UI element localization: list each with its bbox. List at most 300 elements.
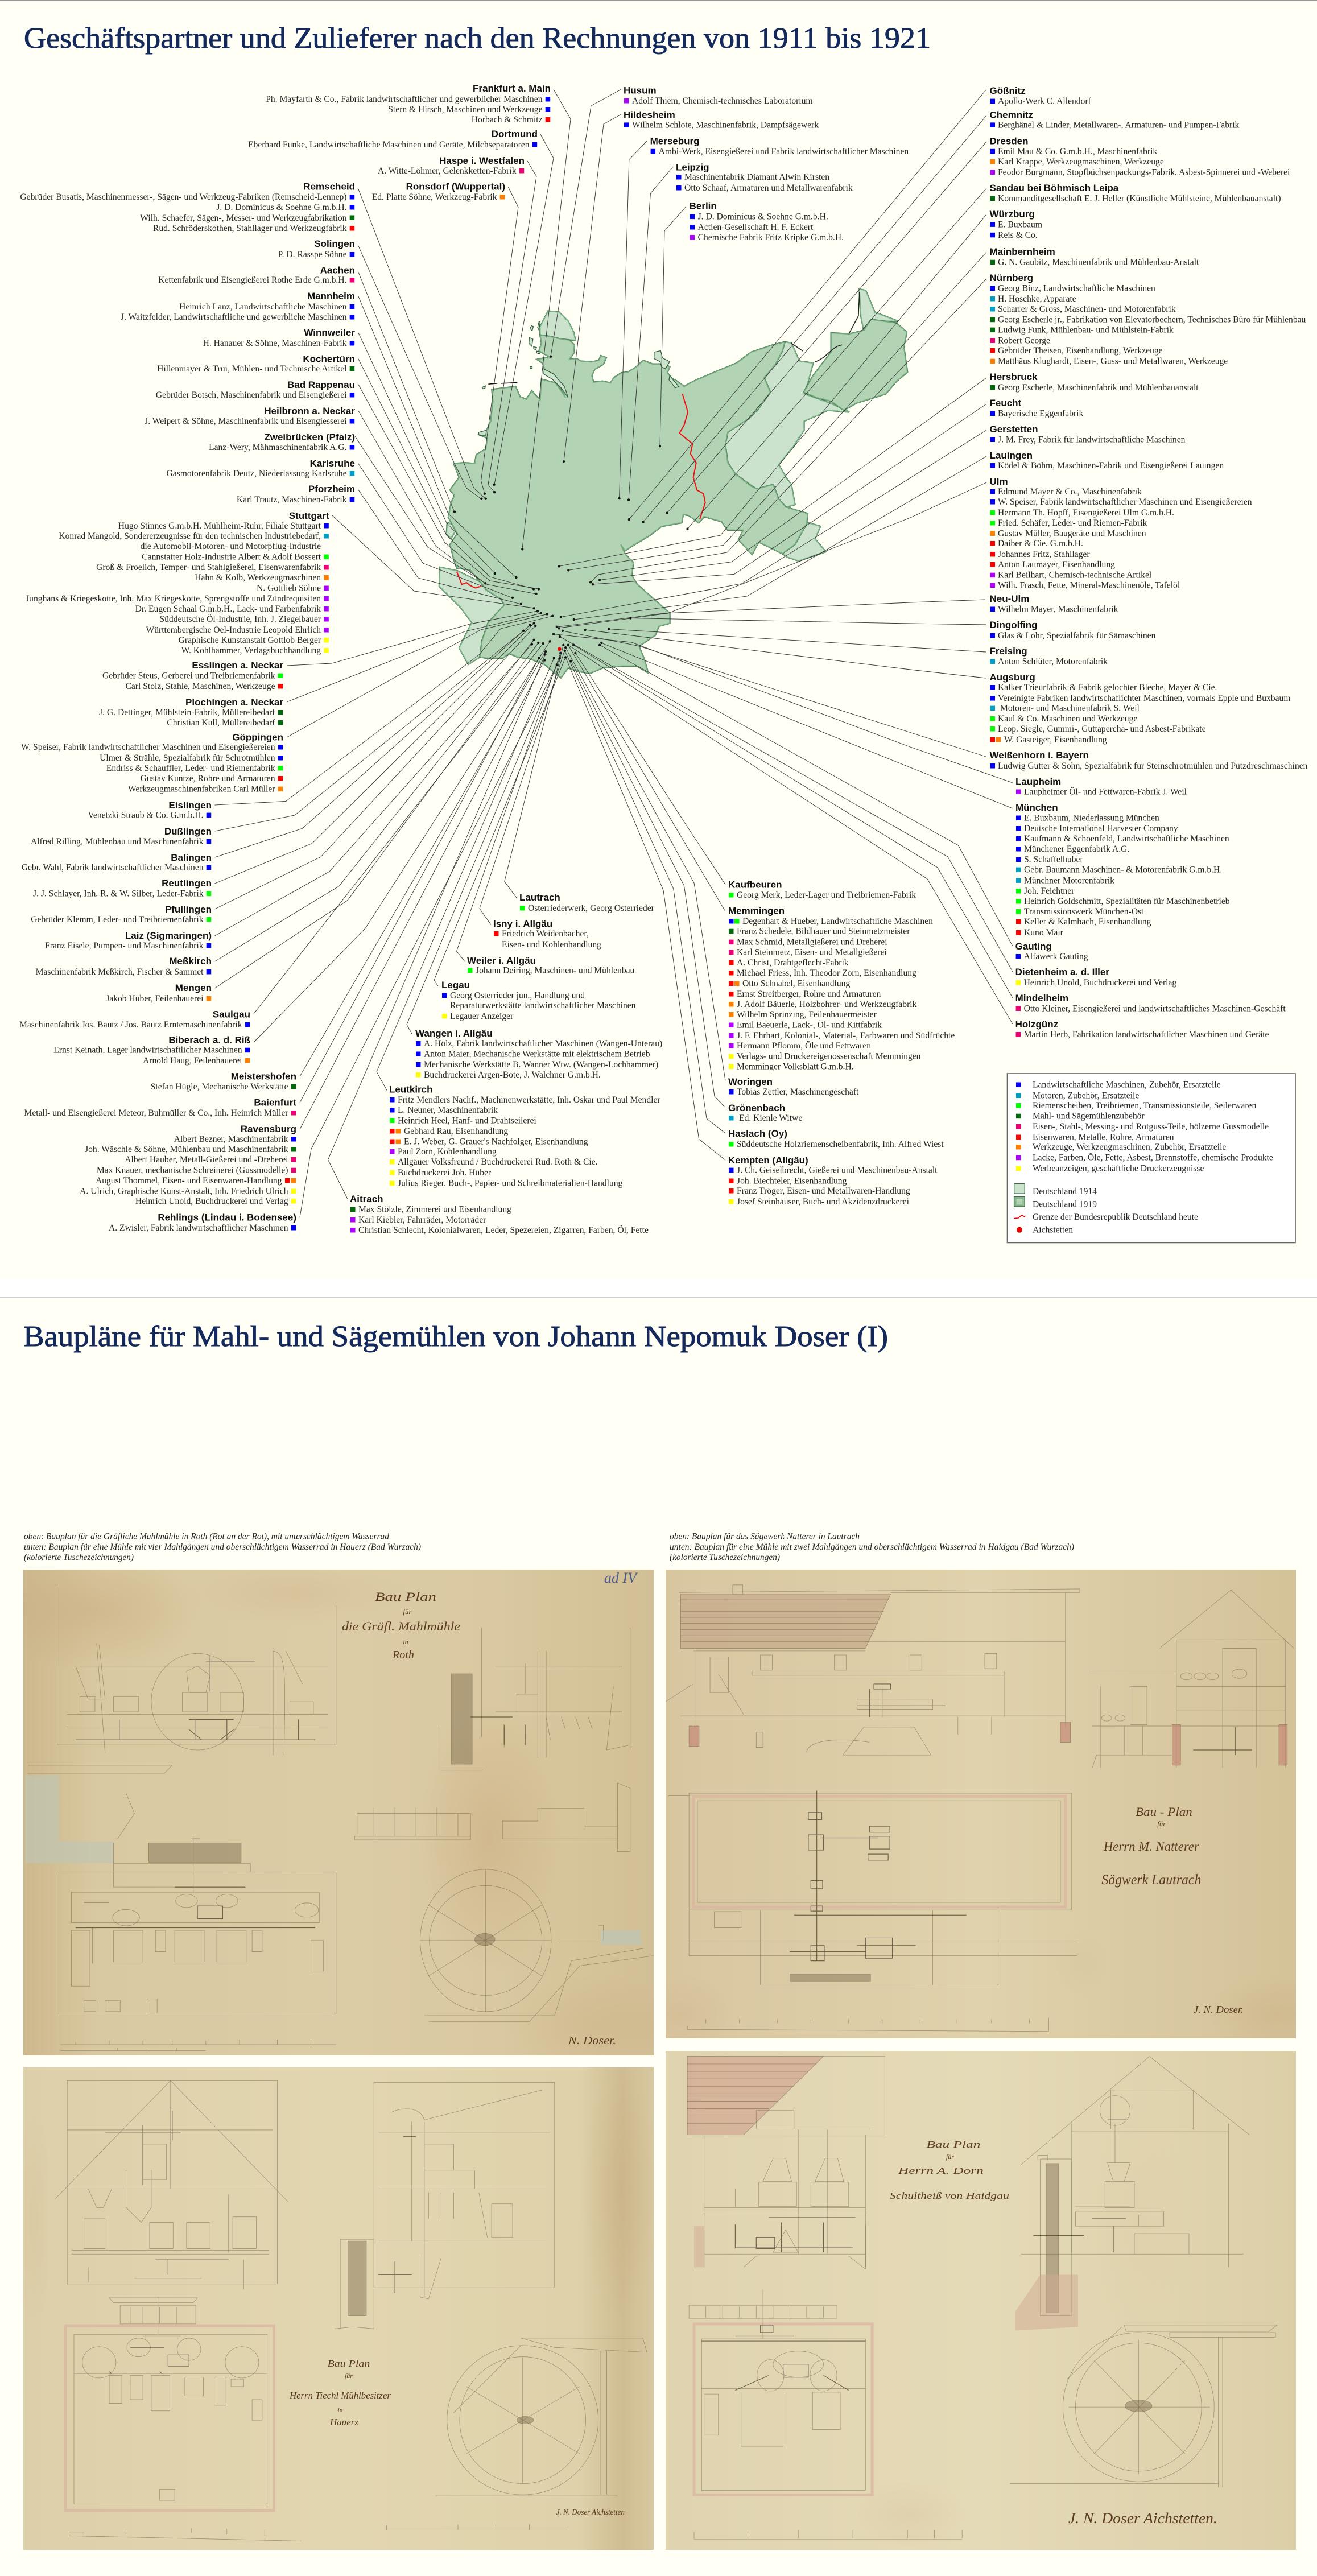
block: Grönenbach: Ed. Kienle Witwe bbox=[739, 1113, 802, 1123]
block: Woringen: Woringen bbox=[728, 1076, 773, 1087]
block: Wangen i. Allgäu: Mechanische Werkstätte B. Wanner Wtw. (Wangen-Lochhammer) bbox=[424, 1060, 658, 1070]
block: Holzgünz: Holzgünz bbox=[1015, 1019, 1058, 1030]
block: Isny i. Allgäu bbox=[493, 918, 601, 950]
block: Haspe i. Westfalen bbox=[378, 155, 525, 176]
legend: Lacke, Farben, Öle, Fette, Asbest, Brennstoffe, chemische Produkte bbox=[1033, 1153, 1273, 1163]
block: Lauingen: Ködel & Böhm, Maschinen-Fabrik und Eisengießerei Lauingen bbox=[998, 461, 1224, 470]
block: Weißenhorn i. Bayern bbox=[990, 750, 1308, 771]
block: Feucht bbox=[990, 398, 1083, 419]
block: Mannheim: J. Waitzfelder, Landwirtschaftliche und gewerbliche Maschinen bbox=[121, 312, 347, 322]
block: Mainbernheim: G. N. Gaubitz, Maschinenfabrik und Mühlenbau-Anstalt bbox=[998, 258, 1199, 267]
block: Wangen i. Allgäu: A. Hölz, Fabrik landwirtschaftlicher Maschinen (Wangen-Unterau) bbox=[424, 1039, 662, 1048]
block: Plochingen a. Neckar: J. G. Dettinger, Mühlstein-Fabrik, Müllereibedarf bbox=[99, 708, 275, 717]
block: München: S. Schaffelhuber bbox=[1024, 855, 1083, 865]
block: Merseburg bbox=[650, 135, 909, 156]
block: Nürnberg: Matthäus Klughardt, Eisen-, Guss- und Metallwaren, Werkzeuge bbox=[998, 357, 1228, 366]
block: Leipzig bbox=[676, 162, 853, 193]
block: Ulm: Fried. Schäfer, Leder- und Riemen-Fabrik bbox=[998, 518, 1147, 528]
block: Aitrach: Aitrach bbox=[350, 1194, 383, 1204]
caption: left column bbox=[24, 1531, 421, 1562]
block: Augsburg: Vereinigte Fabriken landwirtschaflichter Maschinen, vormals Epple und Buxbaum bbox=[998, 693, 1290, 703]
block: Winnweiler: H. Hanauer & Söhne, Maschinen-Fabrik bbox=[203, 338, 347, 348]
block: Stuttgart bbox=[26, 510, 329, 655]
block: Rehlings: Rehlings (Lindau i. Bodensee) bbox=[158, 1212, 296, 1223]
caption: right column: (kolorierte Tuschezeichnungen) bbox=[670, 1553, 780, 1562]
block: Kochertürn: Hillenmayer & Trui, Mühlen- und Technische Artikel bbox=[157, 364, 347, 374]
block: Karlsruhe bbox=[167, 458, 355, 478]
block: Kaufbeuren bbox=[728, 880, 916, 900]
block: Augsburg: Kaul & Co. Maschinen und Werkzeuge bbox=[998, 714, 1137, 724]
block: Haslach (Oy): Haslach (Oy) bbox=[728, 1128, 787, 1139]
blueprint: Gräfliche Mahlmühle Roth: für bbox=[403, 1607, 412, 1616]
block: Laiz (Sigmaringen) bbox=[45, 930, 212, 951]
block: Wangen i. Allgäu: Buchdruckerei Argen-Bote, J. Walchner G.m.b.H. bbox=[424, 1070, 601, 1080]
block: Woringen bbox=[728, 1076, 859, 1097]
block: Dußlingen bbox=[31, 826, 212, 847]
block: Kempten (Allgäu): Franz Tröger, Eisen- und Metallwaren-Handlung bbox=[737, 1186, 910, 1196]
block: Legau: Georg Osterrieder jun., Handlung und bbox=[450, 991, 585, 1000]
block: Legau: Legau bbox=[441, 980, 470, 990]
block: Memmingen: Wilhelm Sprinzing, Feilenhauermeister bbox=[737, 1010, 877, 1019]
block: Plochingen a. Neckar: Plochingen a. Neckar bbox=[185, 697, 283, 708]
block: Biberach a. d. Riß: Ernst Keinath, Lager landwirtschaftlicher Maschinen bbox=[53, 1046, 242, 1055]
block: Göppingen: Werkzeugmaschinenfabriken Carl Müller bbox=[128, 785, 275, 794]
legend: Deutschland 1919 bbox=[1033, 1200, 1097, 1209]
block: Kochertürn bbox=[157, 354, 355, 374]
block: Merseburg: Merseburg bbox=[650, 135, 700, 146]
block: Nürnberg: Robert George bbox=[998, 336, 1050, 346]
block: Woringen: Tobias Zettler, Maschinengeschäft bbox=[737, 1087, 859, 1097]
block: Legau: Reparaturwerkstätte landwirtschaftlicher Maschinen bbox=[450, 1001, 636, 1010]
block: Mindelheim bbox=[1015, 993, 1286, 1014]
blueprint: Gräfliche Mahlmühle Roth: die Gräfl. Mahlmühle bbox=[342, 1619, 460, 1633]
block: Stuttgart: Konrad Mangold, Sondererzeugnisse für den technischen Industriebedarf, bbox=[59, 531, 321, 541]
map location dots bbox=[453, 356, 689, 666]
block: Berlin bbox=[690, 201, 844, 242]
block: Meßkirch bbox=[36, 956, 212, 977]
block: Pforzheim: Karl Trautz, Maschinen-Fabrik bbox=[237, 495, 347, 505]
block: Neu-Ulm: Neu-Ulm bbox=[990, 593, 1029, 604]
block: Lauingen bbox=[990, 450, 1224, 470]
block: Ulm: Anton Laumayer, Eisenhandlung bbox=[998, 560, 1115, 569]
block: Weißenhorn i. Bayern: Weißenhorn i. Bayern bbox=[990, 750, 1089, 761]
block: Dußlingen: Alfred Rilling, Mühlenbau und Maschinenfabrik bbox=[31, 837, 204, 847]
block: Nürnberg: Gebrüder Theisen, Eisenhandlung, Werkzeuge bbox=[998, 346, 1163, 356]
legend: Motoren, Zubehör, Ersatzteile bbox=[1033, 1091, 1139, 1100]
block: Nürnberg: Georg Escherle jr., Fabrikation von Elevatorbechern, Technisches Büro für Mühlenbau bbox=[998, 315, 1306, 325]
block: Stuttgart: Hahn & Kolb, Werkzeugmaschinen bbox=[195, 573, 321, 583]
block: Hildesheim: Hildesheim bbox=[624, 109, 675, 121]
blueprint: Mühle Haidgau: für bbox=[946, 2153, 954, 2161]
block: Augsburg: Kalker Trieurfabrik & Fabrik gelochter Bleche, Mayer & Cie. bbox=[998, 683, 1217, 692]
block: München: E. Buxbaum, Niederlassung München bbox=[1024, 814, 1159, 823]
block: Weiler i. Allgäu: Johann Deiring, Maschinen- und Mühlenbau bbox=[476, 966, 635, 976]
legend: Deutschland 1914 bbox=[1033, 1187, 1097, 1196]
block: Winnweiler bbox=[203, 327, 355, 348]
blueprint: Mühle Hauerz: Herrn Tiechl Mühlbesitzer bbox=[289, 2390, 391, 2401]
block: Memmingen: Memmingen bbox=[728, 906, 785, 916]
block: Hildesheim bbox=[624, 109, 819, 130]
block: Mindelheim: Otto Kleiner, Eisengießerei und landwirtschaftliches Maschinen-Geschäft bbox=[1024, 1004, 1286, 1014]
block: Remscheid: Wilh. Schaefer, Sägen-, Messer- und Werkzeugfabrikation bbox=[140, 213, 347, 223]
block: München: München bbox=[1015, 802, 1058, 813]
block: Meistershofen: Meistershofen bbox=[231, 1071, 296, 1082]
block: Augsburg: W. Gasteiger, Eisenhandlung bbox=[1004, 735, 1107, 745]
block: Weiler i. Allgäu: Weiler i. Allgäu bbox=[467, 955, 536, 966]
blueprint: Mühle Haidgau: Herrn A. Dorn bbox=[897, 2165, 984, 2176]
block: Memmingen: J. Adolf Bäuerle, Holzbohrer- und Werkzeugfabrik bbox=[737, 1000, 917, 1009]
block: Lautrach: Lautrach bbox=[519, 892, 560, 903]
block: Memmingen: Degenhart & Hueber, Landwirtschaftliche Maschinen bbox=[742, 917, 933, 926]
legend: Grenze der Bundesrepublik Deutschland heute bbox=[1033, 1212, 1198, 1222]
block: Memmingen: Verlags- und Druckereigenossenschaft Memmingen bbox=[737, 1052, 921, 1062]
block: Frankfurt a. Main: Ph. Mayfarth & Co., Fabrik landwirtschaftlicher und gewerblicher Maschinen bbox=[266, 94, 543, 104]
block: Aachen bbox=[158, 265, 355, 285]
block: Haslach (Oy) bbox=[728, 1128, 944, 1149]
block: Gerstetten: Gerstetten bbox=[990, 424, 1038, 435]
block: Meßkirch: Maschinenfabrik Meßkirch, Fischer & Sammet bbox=[36, 967, 204, 977]
block: Isny i. Allgäu: Eisen- und Kohlenhandlung bbox=[502, 940, 601, 950]
block: Biberach a. d. Riß bbox=[53, 1034, 250, 1066]
block: Stuttgart: Württembergische Oel-Industrie Leopold Ehrlich bbox=[146, 625, 321, 635]
block: Leutkirch: Julius Rieger, Buch-, Papier- und Schreibmaterialien-Handlung bbox=[398, 1179, 623, 1188]
block: Reutlingen: Reutlingen bbox=[162, 878, 212, 889]
block: Balingen: Gebr. Wahl, Fabrik landwirtschaftlicher Maschinen bbox=[22, 863, 204, 873]
block: Stuttgart: Hugo Stinnes G.m.b.H. Mühlheim-Ruhr, Filiale Stuttgart bbox=[118, 521, 321, 531]
block: Memmingen: J. F. Ehrhart, Kolonial-, Material-, Farbwaren und Südfrüchte bbox=[737, 1031, 955, 1041]
block: Freising: Anton Schlüter, Motorenfabrik bbox=[998, 657, 1108, 667]
block: Stuttgart: Graphische Kunstanstalt Gottlob Berger bbox=[179, 635, 321, 645]
block: Mengen: Mengen bbox=[175, 982, 212, 993]
block: Dietenheim a. d. Iller: Dietenheim a. d. Iller bbox=[1015, 967, 1109, 977]
block: Neu-Ulm: Wilhelm Mayer, Maschinenfabrik bbox=[998, 604, 1118, 614]
block: München bbox=[1015, 802, 1230, 938]
block: Lautrach bbox=[519, 892, 655, 913]
blueprint: Sägewerk Natterer Lautrach: Bau - Plan bbox=[1136, 1805, 1192, 1819]
top rule bbox=[0, 0, 1317, 1]
block: Nürnberg: H. Hoschke, Apparate bbox=[998, 294, 1076, 304]
block: Gauting: Alfawerk Gauting bbox=[1024, 952, 1088, 961]
block: Heilbronn a. Neckar bbox=[145, 406, 355, 426]
block: Gößnitz: Gößnitz bbox=[990, 85, 1026, 96]
block: Kempten (Allgäu): Kempten (Allgäu) bbox=[728, 1155, 808, 1166]
block: Biberach a. d. Riß: Biberach a. d. Riß bbox=[168, 1034, 250, 1046]
block: Rehlings: A. Zwisler, Fabrik landwirtschaftlicher Maschinen bbox=[109, 1223, 288, 1233]
block: Eislingen: Venetzki Straub & Co. G.m.b.H. bbox=[88, 811, 204, 820]
block: Aitrach: Karl Kiebler, Fahrräder, Motorräder bbox=[358, 1215, 486, 1225]
block: Zweibrücken (Pfalz): Zweibrücken (Pfalz) bbox=[264, 432, 355, 443]
block: Merseburg: Ambi-Werk, Eisengießerei und Fabrik landwirtschaftlicher Maschinen bbox=[659, 147, 909, 156]
block: Ulm: Hermann Th. Hopff, Eisengießerei Ulm G.m.b.H. bbox=[998, 508, 1174, 518]
block: Memmingen bbox=[728, 906, 955, 1072]
blueprint: Sägewerk Natterer Lautrach: J. N. Doser. bbox=[1194, 2004, 1244, 2015]
block: Ulm: Daiber & Cie. G.m.b.H. bbox=[998, 539, 1083, 548]
block: Kempten (Allgäu): J. Ch. Geiselbrecht, Gießerei und Maschinenbau-Anstalt bbox=[737, 1166, 938, 1175]
block: Laupheim: Laupheimer Öl- und Fettwaren-Fabrik J. Weil bbox=[1024, 787, 1187, 796]
blueprint: Mühle Hauerz: Hauerz bbox=[329, 2417, 358, 2428]
block: Haspe i. Westfalen: Haspe i. Westfalen bbox=[439, 155, 525, 166]
block: Nürnberg: Ludwig Funk, Mühlenbau- und Mühlstein-Fabrik bbox=[998, 325, 1174, 335]
block: Baienfurt: Metall- und Eisengießerei Meteor, Buhmüller & Co., Inh. Heinrich Müller bbox=[24, 1108, 288, 1118]
block: Memmingen: Hermann Pflomm, Öle und Fettwaren bbox=[737, 1041, 871, 1051]
block: Frankfurt a. Main: Horbach & Schmitz bbox=[472, 115, 543, 125]
block: Solingen bbox=[278, 238, 355, 259]
block: Leutkirch: Paul Zorn, Kohlenhandlung bbox=[398, 1147, 497, 1157]
block: Stuttgart: die Automobil-Motoren- und Motorpflug-Industrie bbox=[141, 542, 321, 551]
block: Pfullingen: Gebrüder Klemm, Leder- und Treibriemenfabrik bbox=[31, 915, 204, 924]
caption: right column: oben: Bauplan für das Sägewerk Natterer in Lautrach bbox=[670, 1531, 860, 1542]
block: Ravensburg bbox=[80, 1124, 296, 1206]
block: Pfullingen bbox=[31, 904, 212, 924]
block: Reutlingen: J. J. Schlayer, Inh. R. & W. Silber, Leder-Fabrik bbox=[33, 889, 204, 899]
block: Kempten (Allgäu) bbox=[728, 1155, 938, 1207]
blueprint: Mühle Hauerz: in bbox=[338, 2407, 343, 2414]
block: Bad Rappenau: Bad Rappenau bbox=[287, 379, 355, 390]
block: Leipzig: Leipzig bbox=[676, 162, 709, 172]
block: Gößnitz: Apollo-Werk C. Allendorf bbox=[998, 97, 1092, 106]
block: Dortmund: Eberhard Funke, Landwirtschaftliche Maschinen und Geräte, Milchseparatoren bbox=[248, 140, 530, 150]
block: Ravensburg: Max Knauer, mechanische Schreinerei (Gussmodelle) bbox=[97, 1166, 288, 1175]
block: Reutlingen bbox=[33, 878, 212, 899]
blueprint: Gräfliche Mahlmühle Roth: in bbox=[403, 1638, 408, 1646]
legend: Riemenscheiben, Treibriemen, Transmissionsteile, Seilerwaren bbox=[1033, 1101, 1256, 1111]
block: Ronsdorf bbox=[372, 181, 505, 202]
block: Sandau bei Böhmisch Leipa bbox=[990, 183, 1281, 204]
block: Memmingen: Otto Schnabel, Eisenhandlung bbox=[742, 979, 850, 989]
legend: Eisen-, Stahl-, Messing- und Rotguss-Teile, hölzerne Gussmodelle bbox=[1033, 1122, 1269, 1132]
block: Mainbernheim: Mainbernheim bbox=[990, 246, 1055, 257]
block: Berlin: J. D. Dominicus & Soehne G.m.b.H. bbox=[698, 212, 828, 222]
block: München: Gebr. Baumann Maschinen- & Motorenfabrik G.m.b.H. bbox=[1024, 865, 1222, 875]
block: Aitrach: Christian Schlecht, Kolonialwaren, Leder, Spezereien, Zigarren, Farben, Öl, Fette bbox=[358, 1225, 649, 1235]
block: Laupheim: Laupheim bbox=[1015, 777, 1061, 787]
block: Esslingen a. Neckar: Carl Stolz, Stahle, Maschinen, Werkzeuge bbox=[125, 682, 275, 691]
block: Heilbronn a. Neckar: J. Weipert & Söhne, Maschinenfabrik und Eisengiesserei bbox=[145, 416, 347, 426]
block: Göppingen bbox=[21, 732, 283, 794]
block: Stuttgart: N. Gottlieb Söhne bbox=[257, 584, 321, 593]
block: Dresden bbox=[990, 135, 1290, 177]
block: Wangen i. Allgäu: Wangen i. Allgäu bbox=[415, 1028, 493, 1039]
block: Biberach a. d. Riß: Arnold Haug, Feilenhauerei bbox=[143, 1056, 242, 1066]
block: Isny i. Allgäu: Isny i. Allgäu bbox=[493, 918, 552, 930]
blueprint: Mühle Hauerz: für bbox=[345, 2372, 353, 2380]
block: Lauingen: Lauingen bbox=[990, 450, 1033, 461]
blueprint: Mühle Haidgau bbox=[666, 2051, 1296, 2550]
block: Leutkirch: Buchdruckerei Joh. Hüber bbox=[398, 1168, 492, 1178]
block: Stuttgart: Dr. Eugen Schaal G.m.b.H., Lack- und Farbenfabrik bbox=[135, 604, 321, 614]
block: Aachen: Aachen bbox=[320, 265, 355, 275]
blueprint: Sägewerk Natterer Lautrach: Sägwerk Lautrach bbox=[1101, 1872, 1201, 1888]
block: Pforzheim: Pforzheim bbox=[308, 484, 355, 494]
block: München: Kaufmann & Schoenfeld, Landwirtschaftliche Maschinen bbox=[1024, 834, 1229, 844]
block: Frankfurt a. Main: Stern & Hirsch, Maschinen und Werkzeuge bbox=[388, 105, 543, 114]
block: Würzburg bbox=[990, 209, 1042, 240]
block: Sandau bei Böhmisch Leipa: Sandau bei Böhmisch Leipa bbox=[990, 183, 1119, 193]
blueprint: Gräfliche Mahlmühle Roth: Roth bbox=[392, 1649, 414, 1661]
block: Leutkirch: Leutkirch bbox=[389, 1084, 433, 1095]
block: Solingen: Solingen bbox=[314, 238, 355, 249]
blueprint: Mühle Hauerz: Bau Plan bbox=[327, 2358, 370, 2369]
block: Ulm: Wilh. Frasch, Fette, Mineral-Maschinenöle, Tafelöl bbox=[998, 581, 1180, 591]
block: Eislingen: Eislingen bbox=[168, 800, 212, 811]
block: Wangen i. Allgäu bbox=[415, 1028, 662, 1080]
title: Geschäftspartner: Geschäftspartner und Zulieferer nach den Rechnungen von 1911 bis 1921 bbox=[24, 22, 931, 55]
block: Meistershofen: Stefan Hügle, Mechanische Werkstätte bbox=[151, 1082, 288, 1092]
block: Mannheim bbox=[121, 291, 355, 322]
block: München: Münchener Eggenfabrik A.G. bbox=[1024, 844, 1129, 854]
block: Kaufbeuren: Georg Merk, Leder-Lager und Treibriemen-Fabrik bbox=[737, 890, 916, 900]
block: Augsburg: Motoren- und Maschinenfabrik S. Weil bbox=[1000, 704, 1140, 713]
block: Esslingen a. Neckar: Esslingen a. Neckar bbox=[192, 660, 283, 671]
legend: Aichstetten bbox=[1033, 1225, 1073, 1235]
block: Remscheid: J. D. Dominicus & Soehne G.m.b.H. bbox=[216, 203, 347, 212]
blueprint: Sägewerk Natterer Lautrach: Herrn M. Natterer bbox=[1103, 1839, 1200, 1853]
block: Memmingen: Max Schmid, Metallgießerei und Dreherei bbox=[737, 938, 887, 947]
block: Grönenbach: Grönenbach bbox=[728, 1103, 785, 1113]
block: Ronsdorf: Ed. Platte Söhne, Werkzeug-Fabrik bbox=[372, 192, 497, 202]
block: Hersbruck: Georg Escherle, Maschinenfabrik und Mühlenbauanstalt bbox=[998, 383, 1199, 393]
block: Legau bbox=[441, 980, 636, 1021]
block: Feucht: Feucht bbox=[990, 398, 1022, 408]
block: Holzgünz: Martin Herb, Fabrikation landwirtschaftlicher Maschinen und Geräte bbox=[1024, 1030, 1269, 1039]
block: Husum: Adolf Thiem, Chemisch-technisches Laboratorium bbox=[632, 96, 813, 106]
block: Mainbernheim bbox=[990, 246, 1199, 267]
block: Leutkirch bbox=[389, 1084, 660, 1188]
block: Ulm bbox=[990, 476, 1252, 591]
caption: right column: unten: Bauplan für eine Mühle mit zwei Mahlgängen und oberschlächtigem Wasserrad in Haidgau (Bad Wurzach) bbox=[670, 1542, 1074, 1552]
block: Weiler i. Allgäu bbox=[467, 955, 635, 976]
blueprint: Gräfliche Mahlmühle Roth: ad IV bbox=[604, 1570, 638, 1586]
title: Baupläne: Baupläne für Mahl- und Sägemühlen von Johann Nepomuk Doser (I) bbox=[23, 1320, 888, 1353]
block: Leutkirch: Fritz Mendlers Nachf., Machinenwerkstätte, Inh. Oskar und Paul Mendler bbox=[398, 1095, 660, 1105]
block: Meistershofen bbox=[151, 1071, 296, 1092]
block: Chemnitz bbox=[990, 109, 1240, 130]
block: Neu-Ulm bbox=[990, 593, 1118, 614]
block: Memmingen: Karl Steinmetz, Eisen- und Metallgießerei bbox=[737, 948, 887, 957]
block: München: Heinrich Goldschmitt, Spezialitäten für Maschinenbetrieb bbox=[1024, 897, 1230, 906]
block: Mengen bbox=[106, 982, 212, 1004]
block: Esslingen a. Neckar bbox=[102, 660, 283, 691]
block: Kempten (Allgäu): Joh. Biechteler, Eisenhandlung bbox=[737, 1176, 847, 1186]
legend bbox=[1007, 1074, 1295, 1242]
block: Augsburg bbox=[990, 672, 1290, 745]
block: Göppingen: Endriss & Schauffler, Leder- und Riemenfabrik bbox=[106, 763, 275, 773]
block: Ravensburg: Ravensburg bbox=[241, 1124, 296, 1134]
block: Ulm: W. Speiser, Fabrik landwirtschaftlicher Maschinen und Eisengießereien bbox=[998, 497, 1252, 507]
block: Karlsruhe: Karlsruhe bbox=[310, 458, 355, 469]
block: Esslingen a. Neckar: Gebrüder Steus, Gerberei und Treibriemenfabrik bbox=[102, 671, 275, 680]
block: Ulm: Johannes Fritz, Stahllager bbox=[998, 550, 1090, 559]
block: Zweibrücken (Pfalz): Lanz-Wery, Mähmaschinenfabrik A.G. bbox=[209, 443, 347, 452]
block: Würzburg: Reis & Co. bbox=[998, 230, 1038, 240]
map of Germany bbox=[439, 290, 907, 678]
caption: left column: unten: Bauplan für eine Mühle mit vier Mahlgängen und oberschlächtigem Wasserrad in Hauerz (Bad Wurzach) bbox=[24, 1542, 421, 1552]
block: Ravensburg: A. Ulrich, Graphische Kunst-Anstalt, Inh. Friedrich Ulrich bbox=[80, 1187, 288, 1196]
block: Ulm: Ulm bbox=[990, 476, 1008, 487]
block: Würzburg: Würzburg bbox=[990, 209, 1035, 220]
block: Ravensburg: Albert Hauber, Metall-Gießerei und -Dreherei bbox=[125, 1155, 288, 1165]
legend: Eisenwaren, Metalle, Rohre, Armaturen bbox=[1033, 1132, 1174, 1142]
block: Göppingen: Ulmer & Strähle, Spezialfabrik für Schrotmühlen bbox=[100, 753, 275, 763]
blueprint: Sägewerk Natterer Lautrach: für bbox=[1157, 1819, 1166, 1828]
block: Saulgau bbox=[19, 1009, 250, 1030]
block: Berlin: Actien-Gesellschaft H. F. Eckert bbox=[698, 222, 814, 232]
block: Bad Rappenau: Gebrüder Botsch, Maschinenfabrik und Eisengießerei bbox=[156, 390, 347, 400]
block: München: Deutsche International Harvester Company bbox=[1024, 824, 1178, 833]
block: Haspe i. Westfalen: A. Witte-Löhmer, Gelenkketten-Fabrik bbox=[378, 166, 517, 176]
caption: left column: (kolorierte Tuschezeichnungen) bbox=[24, 1553, 134, 1562]
block: Aachen: Kettenfabrik und Eisengießerei Rothe Erde G.m.b.H. bbox=[158, 275, 347, 285]
block: Remscheid: Rud. Schröderskothen, Stahllager und Werkzeugfabrik bbox=[153, 224, 347, 233]
block: Pforzheim bbox=[237, 484, 355, 505]
block: Nürnberg: Georg Binz, Landwirtschaftliche Maschinen bbox=[998, 284, 1155, 294]
block: Pfullingen: Pfullingen bbox=[165, 904, 212, 915]
block: Zweibrücken (Pfalz) bbox=[209, 432, 355, 452]
legend: Werkzeuge, Werkzeugmaschinen, Zubehör, Ersatzteile bbox=[1033, 1142, 1226, 1152]
block: Ulm: Edmund Mayer & Co., Maschinenfabrik bbox=[998, 487, 1142, 497]
block: Ulm: Gustav Müller, Baugeräte und Maschinen bbox=[998, 529, 1146, 538]
block: Laiz (Sigmaringen): Laiz (Sigmaringen) bbox=[125, 930, 212, 941]
block: Dingolfing: Glas & Lohr, Spezialfabrik für Sämaschinen bbox=[998, 631, 1156, 641]
block: Leutkirch: E. J. Weber, G. Grauer's Nachfolger, Eisenhandlung bbox=[404, 1137, 588, 1147]
block: Dingolfing: Dingolfing bbox=[990, 620, 1038, 630]
block: Eislingen bbox=[88, 800, 212, 820]
block: Chemnitz: Chemnitz bbox=[990, 109, 1033, 121]
block: Hersbruck: Hersbruck bbox=[990, 371, 1038, 382]
block: Remscheid: Remscheid bbox=[303, 181, 355, 192]
block: Feucht: Bayerische Eggenfabrik bbox=[998, 408, 1083, 419]
block: Mengen: Jakob Huber, Feilenhauerei bbox=[106, 994, 204, 1004]
block: Memmingen: Michael Friess, Inh. Theodor Zorn, Eisenhandlung bbox=[737, 968, 916, 978]
block: Memmingen: Ernst Streitberger, Rohre und Armaturen bbox=[737, 989, 881, 999]
block: Remscheid bbox=[20, 181, 355, 233]
block: Dresden: Feodor Burgmann, Stopfbüchsenpackungs-Fabrik, Asbest-Spinnerei und -Weberei bbox=[998, 167, 1290, 177]
block: Mindelheim: Mindelheim bbox=[1015, 993, 1068, 1004]
block: Kempten (Allgäu): Josef Steinhauser, Buch- und Akzidenzdruckerei bbox=[737, 1197, 910, 1207]
blueprint: Gräfliche Mahlmühle Roth: N. Doser. bbox=[568, 2034, 616, 2047]
block: Berlin: Chemische Fabrik Fritz Kripke G.m.b.H. bbox=[698, 233, 844, 242]
caption: left column: oben: Bauplan für die Gräfliche Mahlmühle in Roth (Rot an der Rot), mit unterschlächtigem Wasserrad bbox=[24, 1531, 389, 1542]
block: Remscheid: Gebrüder Busatis, Maschinenmesser-, Sägen- und Werkzeug-Fabriken (Remscheid-Lennep) bbox=[20, 192, 347, 202]
blueprint: Mühle Hauerz: J. N. Doser Aichstetten bbox=[556, 2508, 625, 2517]
block: Berlin: Berlin bbox=[690, 201, 717, 212]
block: Saulgau: Maschinenfabrik Jos. Bautz / Jos. Bautz Erntemaschinenfabrik bbox=[19, 1020, 242, 1030]
block: München: Transmissionswerk München-Ost bbox=[1024, 907, 1144, 917]
block: Frankfurt a. Main: Frankfurt a. Main bbox=[473, 83, 551, 94]
caption: right column bbox=[670, 1531, 1074, 1562]
block: Plochingen a. Neckar: Christian Kull, Müllereibedarf bbox=[167, 718, 275, 728]
block: Dietenheim a. d. Iller bbox=[1015, 967, 1176, 988]
blueprint: Mühle Haidgau: Bau Plan bbox=[926, 2139, 980, 2150]
block: Stuttgart: Groß & Froelich, Temper- und Stahlgießerei, Eisenwarenfabrik bbox=[96, 563, 321, 572]
block: Frankfurt a. Main bbox=[266, 83, 551, 125]
block: Ronsdorf: Ronsdorf (Wuppertal) bbox=[406, 181, 505, 192]
block: Ravensburg: Joh. Wäschle & Söhne, Mühlenbau und Maschinenfabrik bbox=[85, 1145, 288, 1154]
block: Nürnberg: Nürnberg bbox=[990, 273, 1033, 283]
legend: Werbeanzeigen, geschäftliche Druckerzeugnisse bbox=[1033, 1164, 1204, 1174]
block: Plochingen a. Neckar bbox=[99, 697, 283, 728]
block: Leutkirch: Heinrich Heel, Hanf- und Drahtseilerei bbox=[398, 1116, 536, 1126]
section separator band bbox=[0, 1278, 1317, 1298]
block: Ravensburg: Albert Bezner, Maschinenfabrik bbox=[174, 1134, 288, 1144]
block: Kochertürn: Kochertürn bbox=[303, 354, 355, 364]
block: Rehlings bbox=[109, 1212, 296, 1233]
leader lines bbox=[215, 89, 1013, 1217]
block: Dingolfing bbox=[990, 620, 1156, 641]
block: Göppingen: Gustav Kuntze, Rohre und Armaturen bbox=[141, 774, 275, 783]
block: Dußlingen: Dußlingen bbox=[164, 826, 212, 837]
block: Memmingen: Emil Baeuerle, Lack-, Öl- und Kittfabrik bbox=[737, 1021, 882, 1030]
